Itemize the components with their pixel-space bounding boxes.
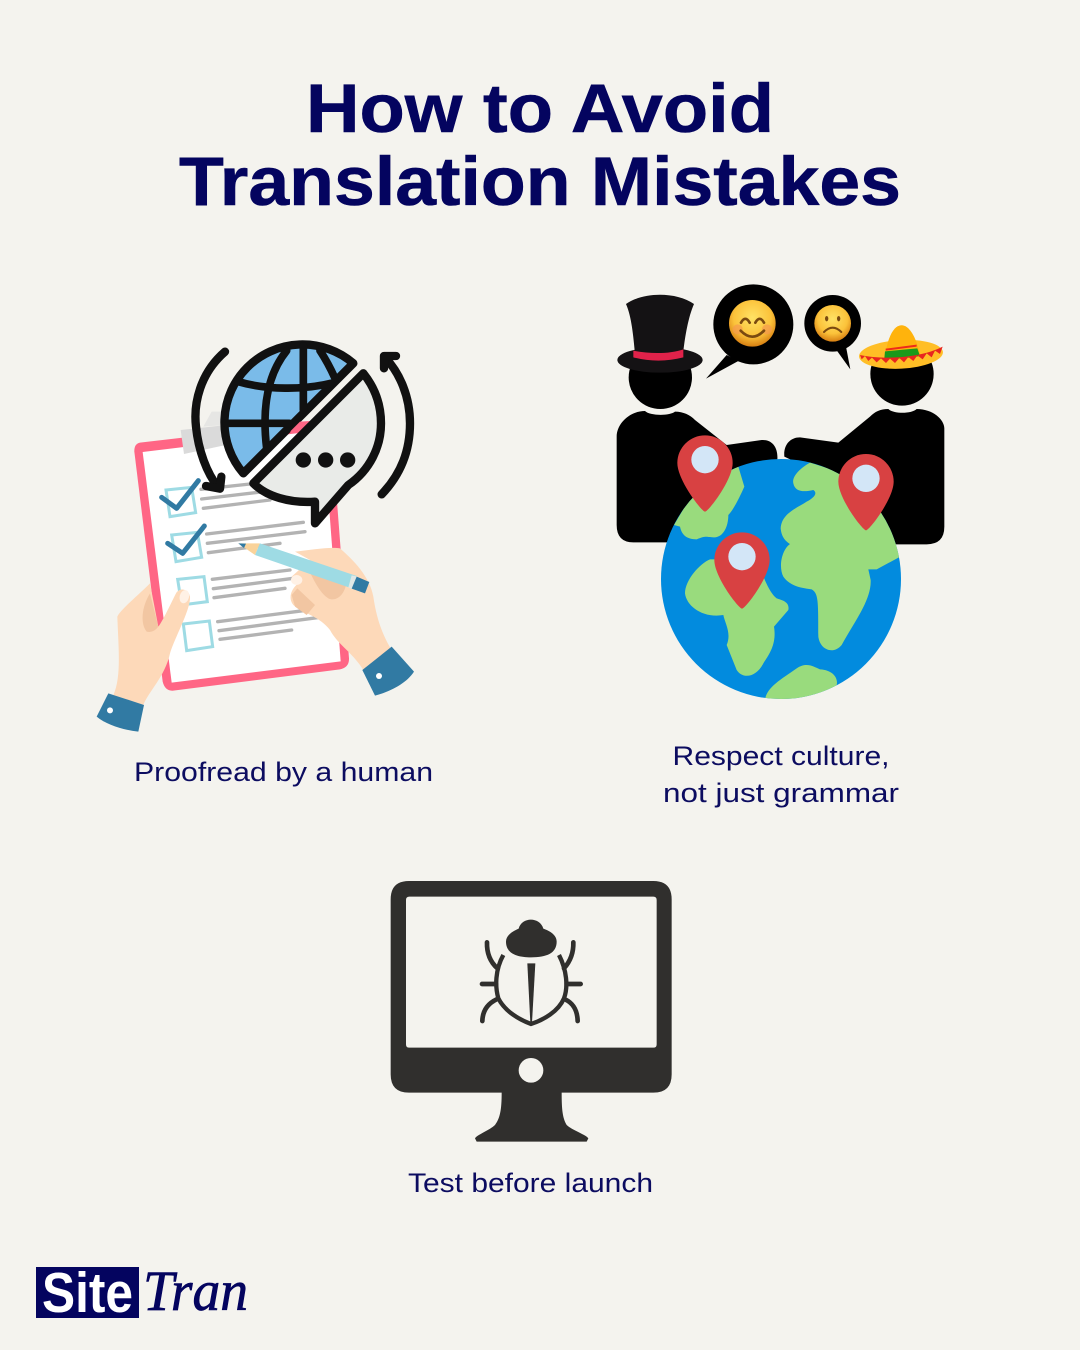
person: left silhouette — [617, 346, 777, 542]
logo: SiteTran: Site — [42, 1261, 133, 1325]
icon: speech bubble half — [253, 373, 381, 523]
label: respect culture: Respect culture, — [672, 741, 890, 771]
icon: bug — [482, 920, 581, 1024]
icon: map pin 2 — [838, 454, 894, 530]
left hand — [97, 583, 191, 732]
icon: map pin 3 — [714, 532, 770, 609]
label: respect culture — [663, 741, 899, 808]
label: test before launch: Test before launch — [408, 1168, 653, 1198]
monitor — [391, 881, 672, 1142]
person: right silhouette — [784, 342, 944, 544]
pink clipboard sliver behind the split — [290, 421, 310, 432]
title: Translation Mistakes — [179, 143, 901, 220]
icon: globe half — [224, 344, 353, 473]
emoji: frowning — [814, 305, 851, 342]
right hand — [291, 548, 414, 696]
globe — [661, 459, 903, 702]
speech bubble: sad — [804, 295, 861, 369]
speech bubble: happy — [706, 284, 793, 379]
pencil — [238, 543, 369, 593]
checklist lines — [201, 484, 320, 639]
illustration: monitor with bug — [391, 881, 672, 1142]
title — [179, 70, 901, 220]
icon: top hat — [617, 295, 703, 373]
label: respect culture: not just grammar — [663, 778, 899, 808]
emoji: smiling — [729, 300, 776, 347]
illustration: two people, emoji and globe — [617, 284, 944, 702]
icon: sombrero — [858, 325, 944, 371]
icon: map pin 1 — [677, 435, 733, 512]
infographic canvas — [36, 82, 944, 1318]
clipboard — [134, 412, 349, 691]
illustration: proofreading clipboard with hands — [97, 344, 414, 732]
arrow: clockwise right — [382, 356, 410, 494]
title: How to Avoid — [306, 70, 774, 147]
logo: SiteTran — [36, 1260, 248, 1325]
label: proofread: Proofread by a human — [134, 757, 433, 787]
logo: SiteTran: Tran — [143, 1260, 248, 1323]
checkboxes — [166, 487, 213, 651]
arrow: counter-clockwise left — [195, 352, 225, 489]
check marks — [162, 481, 204, 553]
